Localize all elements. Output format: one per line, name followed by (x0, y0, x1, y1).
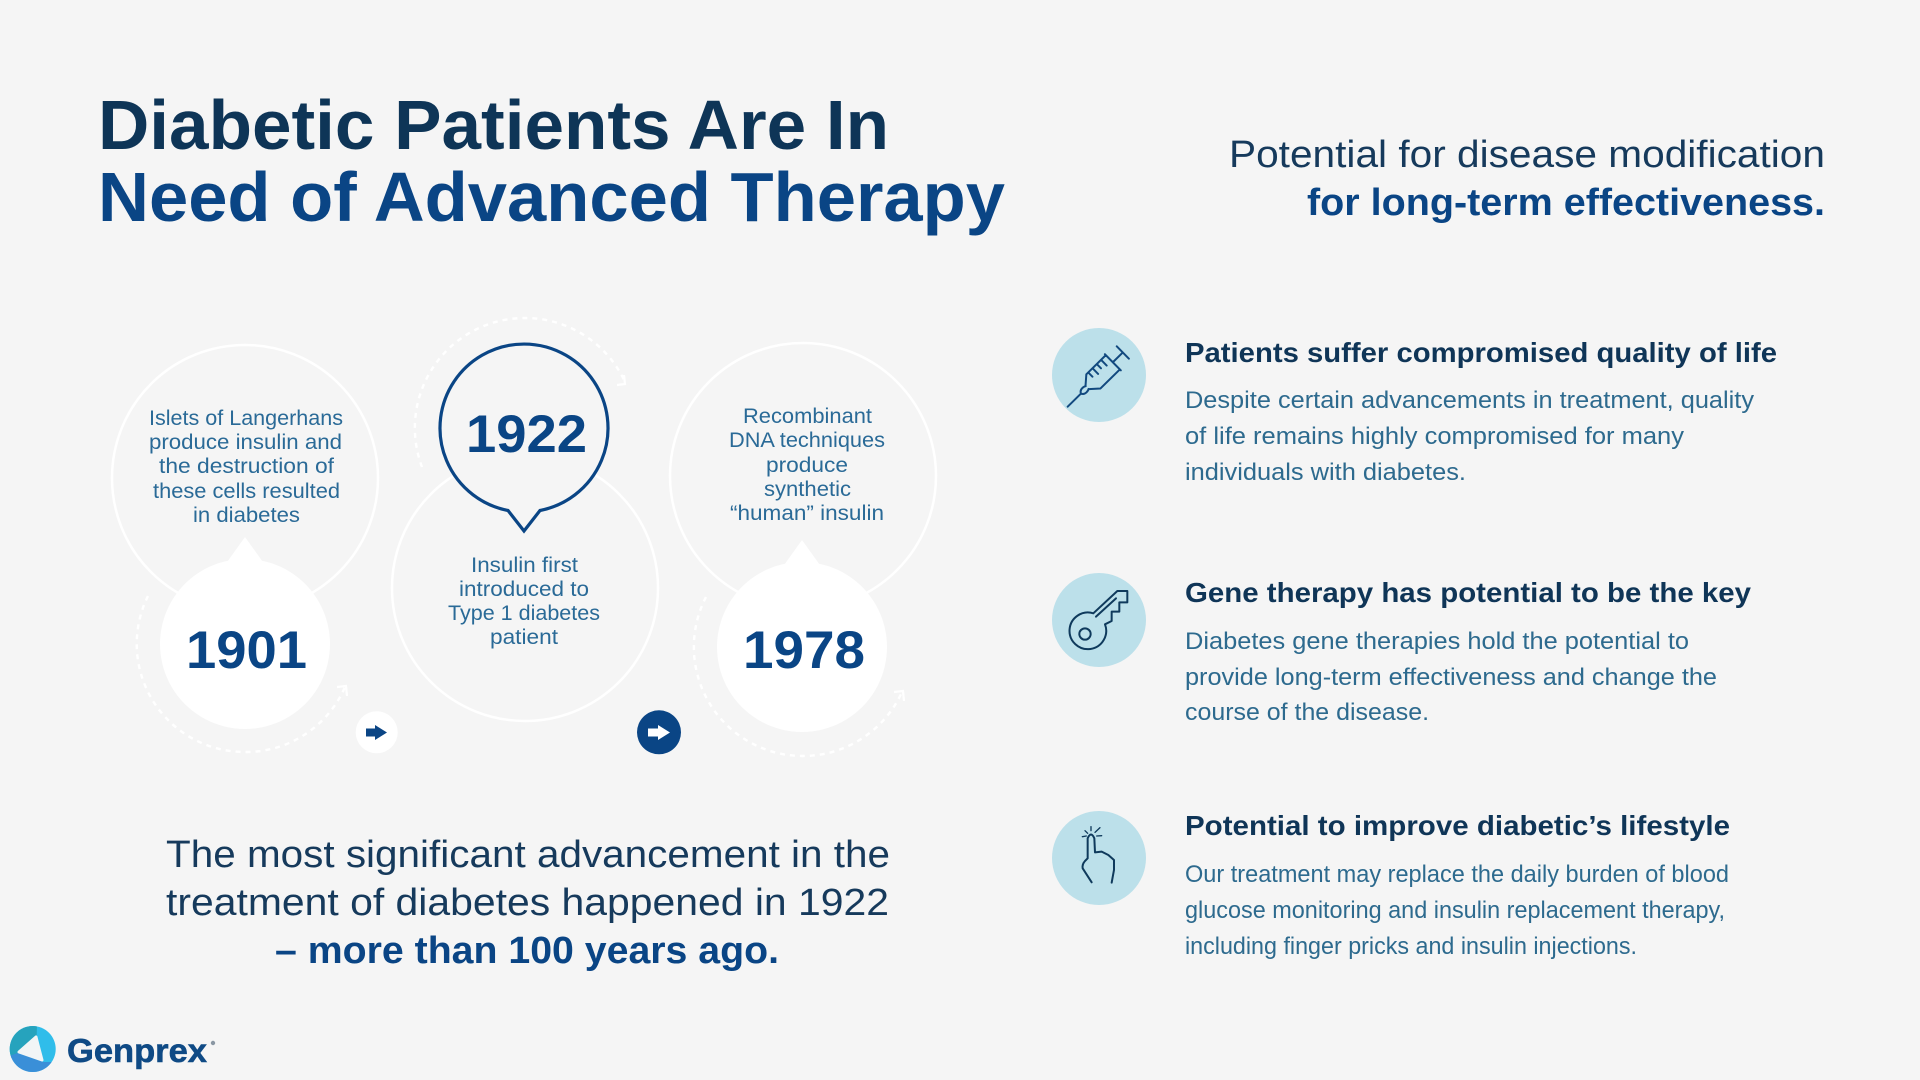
panel: 1978: 1978 (743, 621, 865, 680)
body text (1185, 387, 1754, 486)
panel: quality of life (1052, 328, 1777, 486)
panel: 1978: “human” insulin (730, 502, 884, 525)
heading: Patients suffer compromised quality of life (1185, 337, 1777, 368)
panel: 1901 (112, 345, 378, 752)
body text: including finger pricks and insulin injections. (1185, 933, 1637, 960)
body text (1185, 628, 1717, 726)
panel: 1901: Islets of Langerhans (149, 407, 343, 430)
body text: Despite certain advancements in treatment, quality (1185, 387, 1754, 414)
panel: 1978 (670, 343, 936, 756)
panel: 1922 (392, 318, 658, 721)
panel: lifestyle (1052, 810, 1730, 960)
panel: 1978: Recombinant (743, 405, 872, 428)
panel: 1901: produce insulin and (149, 431, 342, 454)
subtitle: for long-term effectiveness. (1307, 182, 1825, 224)
statement text: – more than 100 years ago. (275, 930, 779, 972)
body text: Diabetes gene therapies hold the potential to (1185, 628, 1689, 655)
icon: key (1052, 573, 1146, 667)
arrow: white button (356, 711, 398, 753)
icon: syringe (1052, 328, 1146, 422)
body text (1185, 861, 1729, 960)
heading: Potential to improve diabetic’s lifestyle (1185, 810, 1730, 841)
panel: 1922: Type 1 diabetes (448, 602, 600, 625)
body text: individuals with diabetes. (1185, 459, 1466, 486)
logo: Genprex: Genprex (67, 1032, 208, 1069)
panel: 1901: in diabetes (193, 504, 300, 527)
heading: Gene therapy has potential to be the key (1185, 577, 1751, 608)
timeline (112, 318, 936, 756)
panel: 1901: 1901 (186, 621, 307, 680)
panel: 1978: produce (766, 454, 848, 477)
panel: 1922: introduced to (459, 578, 589, 601)
arrow: blue button (637, 710, 681, 754)
body text: provide long-term effectiveness and change the (1185, 664, 1717, 691)
statement text (166, 834, 890, 972)
title: Need of Advanced Therapy (98, 158, 1005, 236)
body text: course of the disease. (1185, 699, 1429, 726)
panel: 1901: the destruction of (159, 455, 334, 478)
subtitle: Potential for disease modification (1229, 134, 1825, 176)
panel: 1901: these cells resulted (153, 480, 340, 503)
panel: gene therapy (1052, 573, 1751, 726)
title: Diabetic Patients Are In (98, 86, 889, 164)
statement text: treatment of diabetes happened in 1922 (166, 882, 889, 924)
icon: finger tap (1052, 811, 1146, 905)
body text: glucose monitoring and insulin replacement therapy, (1185, 897, 1725, 924)
body text: of life remains highly compromised for many (1185, 423, 1684, 450)
panel: 1922: patient (490, 626, 558, 649)
logo: Genprex (9, 1025, 215, 1073)
panel: 1978: DNA techniques (729, 429, 885, 452)
panel: 1978: synthetic (764, 478, 851, 501)
statement text: The most significant advancement in the (166, 834, 890, 876)
panel: 1922: 1922 (466, 405, 587, 464)
title (98, 86, 1005, 236)
body text: Our treatment may replace the daily burden of blood (1185, 861, 1729, 888)
panel: 1922: Insulin first (471, 554, 578, 577)
subtitle (1229, 134, 1825, 224)
